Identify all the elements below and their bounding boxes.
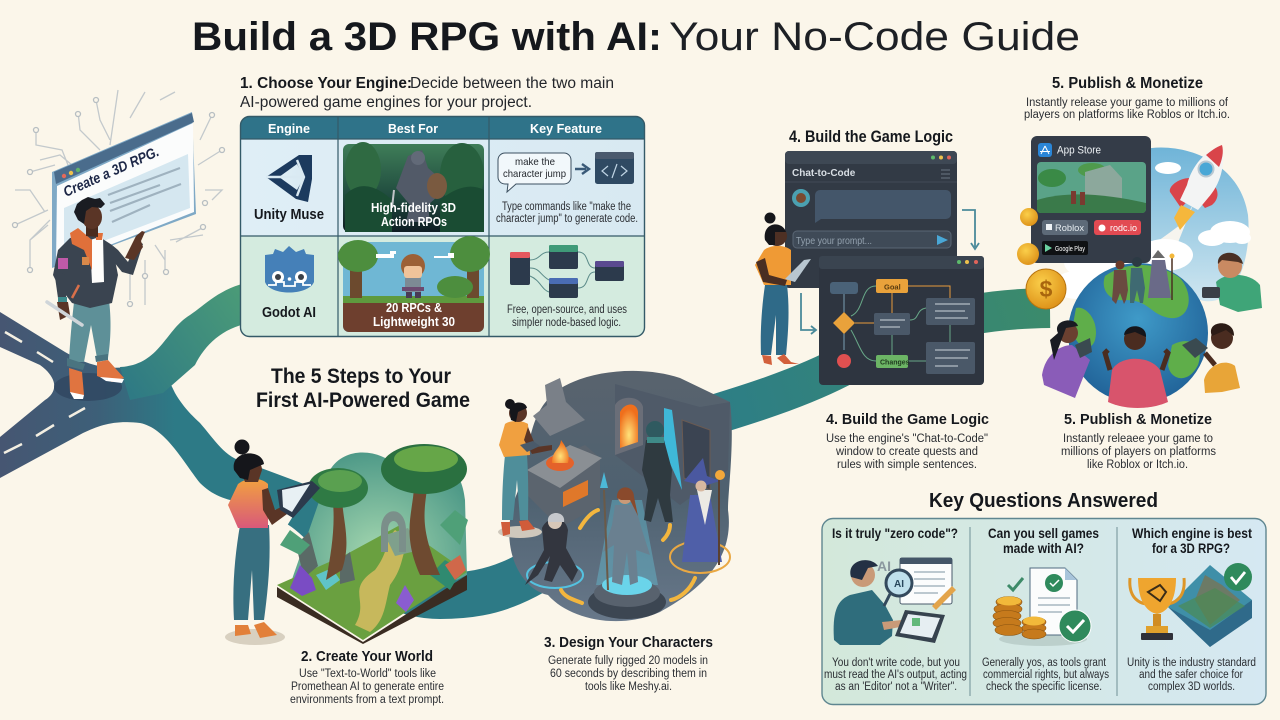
step 4: logic graph window [819,256,984,385]
step 2 text: environments from a text prompt. [290,694,444,706]
walls and forge [527,378,730,528]
question 3: and the safer choice for [1139,669,1243,681]
step 2 text: 2. Create Your World [301,648,433,665]
unity label: Unity Muse [254,207,324,223]
icon: Unity logo [266,155,312,202]
section heading: the 5 steps: First AI-Powered Game [256,389,470,412]
kid in purple shirt [1042,320,1092,398]
person holding tablet [225,440,320,645]
icon: person reviewing AI output: AI [877,558,891,574]
question 2: check the specific license. [986,681,1102,693]
step 1 heading: 1. Choose Your Engine: [240,75,412,92]
step 5 text: Instantly releaee your game to [1063,433,1213,445]
table rows and header: Best For [388,121,438,136]
step 4: chat-to-code window: Type your prompt... [796,235,872,247]
godot label: Godot AI [262,305,316,321]
kid in yellow shirt [1182,323,1240,393]
pedestal with hologram [588,500,666,619]
key questions heading: Key Questions Answered [929,490,1158,512]
section heading: the 5 steps [256,365,470,412]
table rows and header [240,116,645,337]
step 4: chat-to-code window: Chat-to-Code [792,168,856,179]
question 1: Is it truly "zero code"? [832,526,958,541]
key feature: prompt to code: character jump [503,168,566,180]
step 5 text [1061,411,1216,471]
question 2: made with AI? [1003,541,1084,556]
winding road connecting the steps [0,282,1050,596]
step 3: character forge room illustration [498,371,732,621]
question 2: commercial rights, but always [983,669,1109,681]
title: Your No-Code Guide [669,15,1080,59]
question 2: Can you sell games [988,526,1099,541]
question 1 [824,526,967,693]
icon: license document and coins [993,568,1091,646]
question 3: Which engine is best [1132,526,1252,541]
question 3: Unity is the industry standard [1127,657,1256,669]
image: 2D RPG pixel scene: Lightweight 30 [373,315,455,329]
step 5: gold coins: $ [1040,276,1053,302]
question 3 [1127,526,1256,693]
step 4 text: rules with simple sentences. [837,459,977,471]
table rows and header: Engine [268,121,310,136]
step 2 text: Use "Text-to-World" tools like [299,668,436,680]
step 3 text: 3. Design Your Characters [544,634,713,651]
question 2 [982,526,1109,693]
node connectors [844,286,950,361]
key feature: prompt to code: make the [515,156,555,168]
step 4 text: 4. Build the Game Logic [826,411,989,428]
step 5: app store panel: App Store [1057,144,1101,156]
step 4 text [826,411,989,471]
step 4: person with laptop [755,212,811,365]
store banner image [1037,162,1146,213]
title [192,15,1080,59]
key feature: prompt to code [496,152,638,225]
question 3: complex 3D worlds. [1148,681,1235,693]
graph nodes: Changes [880,360,910,366]
step 5 heading and description: 5. Publish & Monetize [1052,75,1203,92]
orange rotation arrows and rings [527,510,730,603]
key feature: node graph: Free, open-source, and uses [507,304,627,316]
table rows and header: Key Feature [530,121,602,136]
step 2 text [290,648,444,706]
engine comparison table [240,116,645,337]
key feature: node graph [507,245,627,329]
step 5 heading and description: Instantly release your game to millions of [1026,97,1229,109]
step 3 text: 60 seconds by describing them in [550,668,707,680]
rocket exhaust [1110,205,1193,270]
key feature: prompt to code: character jump" to generate code. [496,213,638,225]
store chips [1042,220,1141,255]
circuit lines [12,90,224,306]
image: high-fidelity 3D action RPG [343,142,484,232]
step 5: kids playing around the globe [1042,253,1262,408]
person at the forge [498,399,552,538]
step 3 text: tools like Meshy.ai. [585,681,672,693]
step 3 text: Generate fully rigged 20 models in [548,655,708,667]
image: 2D RPG pixel scene [338,236,490,332]
icon: person reviewing AI output: AI [894,579,904,590]
title: Build a 3D RPG with AI: [192,15,662,59]
step 5 heading and description [1024,75,1230,121]
step 5 heading and description: players on platforms like Roblos or Itch.io. [1024,109,1230,121]
question 3: for a 3D RPG? [1152,541,1230,556]
key feature: node graph: simpler node-based logic. [512,317,621,329]
store chips: Roblox [1055,223,1084,234]
step 2: world diorama illustration [225,440,468,645]
step 3 text [544,634,713,693]
question 2: Generally yos, as tools grant [982,657,1107,669]
step 5: gold coins [1017,208,1066,309]
step 4: flow arrows between windows [801,210,979,334]
step 1 heading: AI-powered game engines for your project. [240,94,532,111]
step 1 heading: Decide between the two main [410,75,614,92]
trees [308,444,467,580]
question 1: You don't write code, but you [832,657,960,669]
kid in green shirt [1202,253,1262,312]
terrain block [277,510,468,644]
icon: Godot logo [265,246,314,292]
step 5 text: like Roblox or Itch.io. [1087,459,1188,471]
step 1: intro illustration with prompt window and character [12,90,224,401]
clouds [1054,162,1251,299]
question 1: must read the AI's output, acting [824,669,967,681]
image: 2D RPG pixel scene: 20 RPCs & [386,301,442,315]
prompt window [52,112,196,268]
key feature: prompt to code: Type commands like "make the [502,201,631,213]
step 5: app store panel [1031,136,1151,263]
section heading: the 5 steps: The 5 Steps to Your [271,365,451,388]
character pointing [47,197,145,401]
icon: person reviewing AI output [834,558,956,645]
step 5: globe with characters [1068,250,1208,403]
hero, rogue, assassin and wizard [525,421,725,590]
step 5 text: millions of players on platforms [1061,446,1216,458]
prompt window: Create a 3D RPG. [61,144,162,201]
kid in red shirt [1105,326,1168,408]
icon: trophy and island [1130,563,1252,647]
step 4 text: window to create quests and [835,446,978,458]
step 4 heading above windows: 4. Build the Game Logic [789,127,953,146]
question 1: as an 'Editor' not a "Writer". [835,681,957,693]
misty forest background [290,452,467,625]
step 2 text: Promethean AI to generate entire [291,681,444,693]
step 5: sky, rocket and clouds [1054,145,1251,301]
room blob [509,371,732,621]
panel: key questions [822,518,1266,704]
characters on globe [1112,250,1174,304]
step 4 text: Use the engine's "Chat-to-Code" [826,433,988,445]
step 4: chat-to-code window [785,151,957,288]
store chips: Google Play [1055,244,1085,253]
store chips: rodc.io [1110,223,1137,234]
step 1 heading [240,75,614,111]
graph nodes: Goal [884,282,901,292]
graph nodes [830,279,975,374]
rocket [1170,145,1223,230]
step 5 text: 5. Publish & Monetize [1064,411,1212,428]
image: high-fidelity 3D action RPG: Action RPOs [381,215,447,229]
image: high-fidelity 3D action RPG: High-fidelity 3D [371,201,456,215]
